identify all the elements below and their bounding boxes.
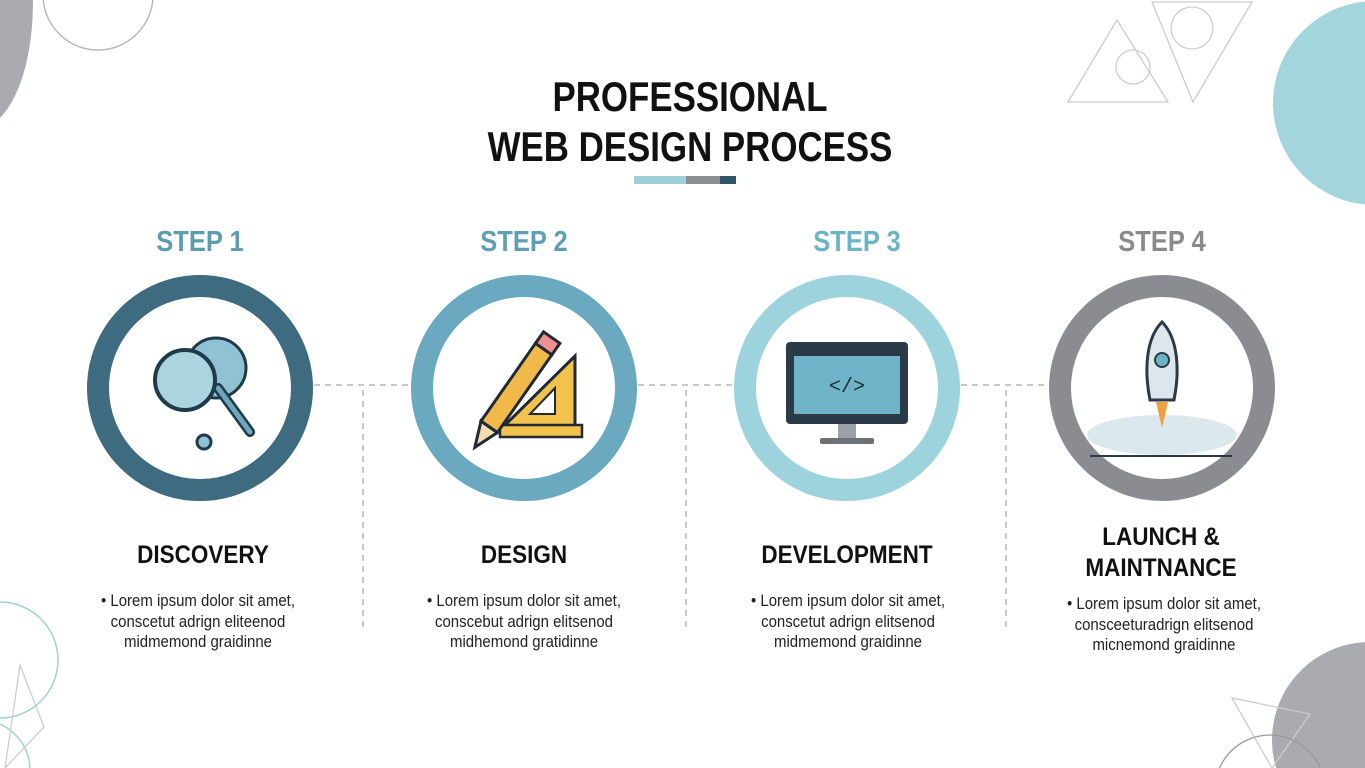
text: MAINTNANCE xyxy=(1085,554,1237,582)
step labels: STEP 1 xyxy=(156,226,244,258)
body texts xyxy=(101,591,295,651)
text: LAUNCH & xyxy=(1102,523,1220,551)
body texts: • Lorem ipsum dolor sit amet, xyxy=(101,591,295,610)
text: STEP 3 xyxy=(813,226,901,258)
text: midhemond gratidinne xyxy=(450,632,598,651)
text: STEP 2 xyxy=(480,226,568,258)
title underline xyxy=(634,176,736,184)
text: consceeturadrign elitsenod xyxy=(1075,614,1253,634)
icon: discovery magnifier xyxy=(98,286,302,490)
title xyxy=(488,73,892,170)
text: • Lorem ipsum dolor sit amet, xyxy=(1067,594,1261,613)
text: • Lorem ipsum dolor sit amet, xyxy=(751,591,945,610)
icon: development monitor xyxy=(745,286,949,490)
text: midmemond graidinne xyxy=(774,632,922,651)
text: micnemond graidinne xyxy=(1092,635,1236,654)
text: • Lorem ipsum dolor sit amet, xyxy=(427,591,621,610)
text: STEP 4 xyxy=(1118,226,1206,258)
icon: launch rocket xyxy=(1060,286,1264,490)
icon: design pencil and triangle xyxy=(422,286,626,490)
step circles with icons xyxy=(87,275,1275,501)
icon: development monitor: </> xyxy=(829,376,865,399)
text: DESIGN xyxy=(481,541,567,569)
title: PROFESSIONAL xyxy=(552,73,828,120)
body texts: midmemond graidinne xyxy=(124,632,272,651)
title: WEB DESIGN PROCESS xyxy=(488,123,892,170)
text: conscetut adrign elitsenod xyxy=(761,612,935,630)
text: DEVELOPMENT xyxy=(761,541,933,569)
body texts: conscetut adrign eliteenod xyxy=(111,612,285,630)
text: conscebut adrign elitsenod xyxy=(435,612,613,630)
headings: DISCOVERY xyxy=(137,541,269,569)
